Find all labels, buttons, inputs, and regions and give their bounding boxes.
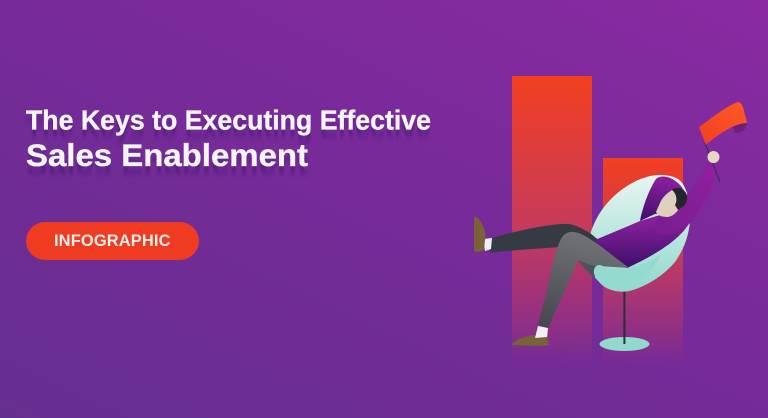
back leg xyxy=(490,224,606,258)
torso xyxy=(595,215,690,268)
front leg xyxy=(538,232,629,328)
button label: INFOGRAPHIC xyxy=(54,232,171,250)
button xyxy=(26,222,199,260)
short red bar xyxy=(603,158,683,364)
illustration: man relaxing in chair in front of bars xyxy=(474,76,747,364)
title: Sales Enablement xyxy=(26,145,309,181)
back shoe xyxy=(474,217,486,252)
front sock xyxy=(535,326,548,338)
chair stem and base xyxy=(600,288,650,351)
title: The Keys to Executing Effective xyxy=(26,112,431,143)
title: Sales Enablement xyxy=(26,137,309,173)
under-thigh shade xyxy=(578,254,610,278)
flag xyxy=(699,102,747,145)
chair shell xyxy=(590,175,690,292)
back sock xyxy=(483,238,492,251)
tall red bar xyxy=(512,76,592,364)
chair front lip xyxy=(594,255,660,291)
fist xyxy=(708,151,720,163)
front shoe xyxy=(512,335,549,346)
face xyxy=(656,190,680,217)
hood xyxy=(640,176,685,221)
raised arm xyxy=(654,164,719,234)
title xyxy=(26,104,431,181)
title: The Keys to Executing Effective xyxy=(26,104,431,136)
hair xyxy=(672,188,687,210)
flag pole xyxy=(705,143,720,182)
